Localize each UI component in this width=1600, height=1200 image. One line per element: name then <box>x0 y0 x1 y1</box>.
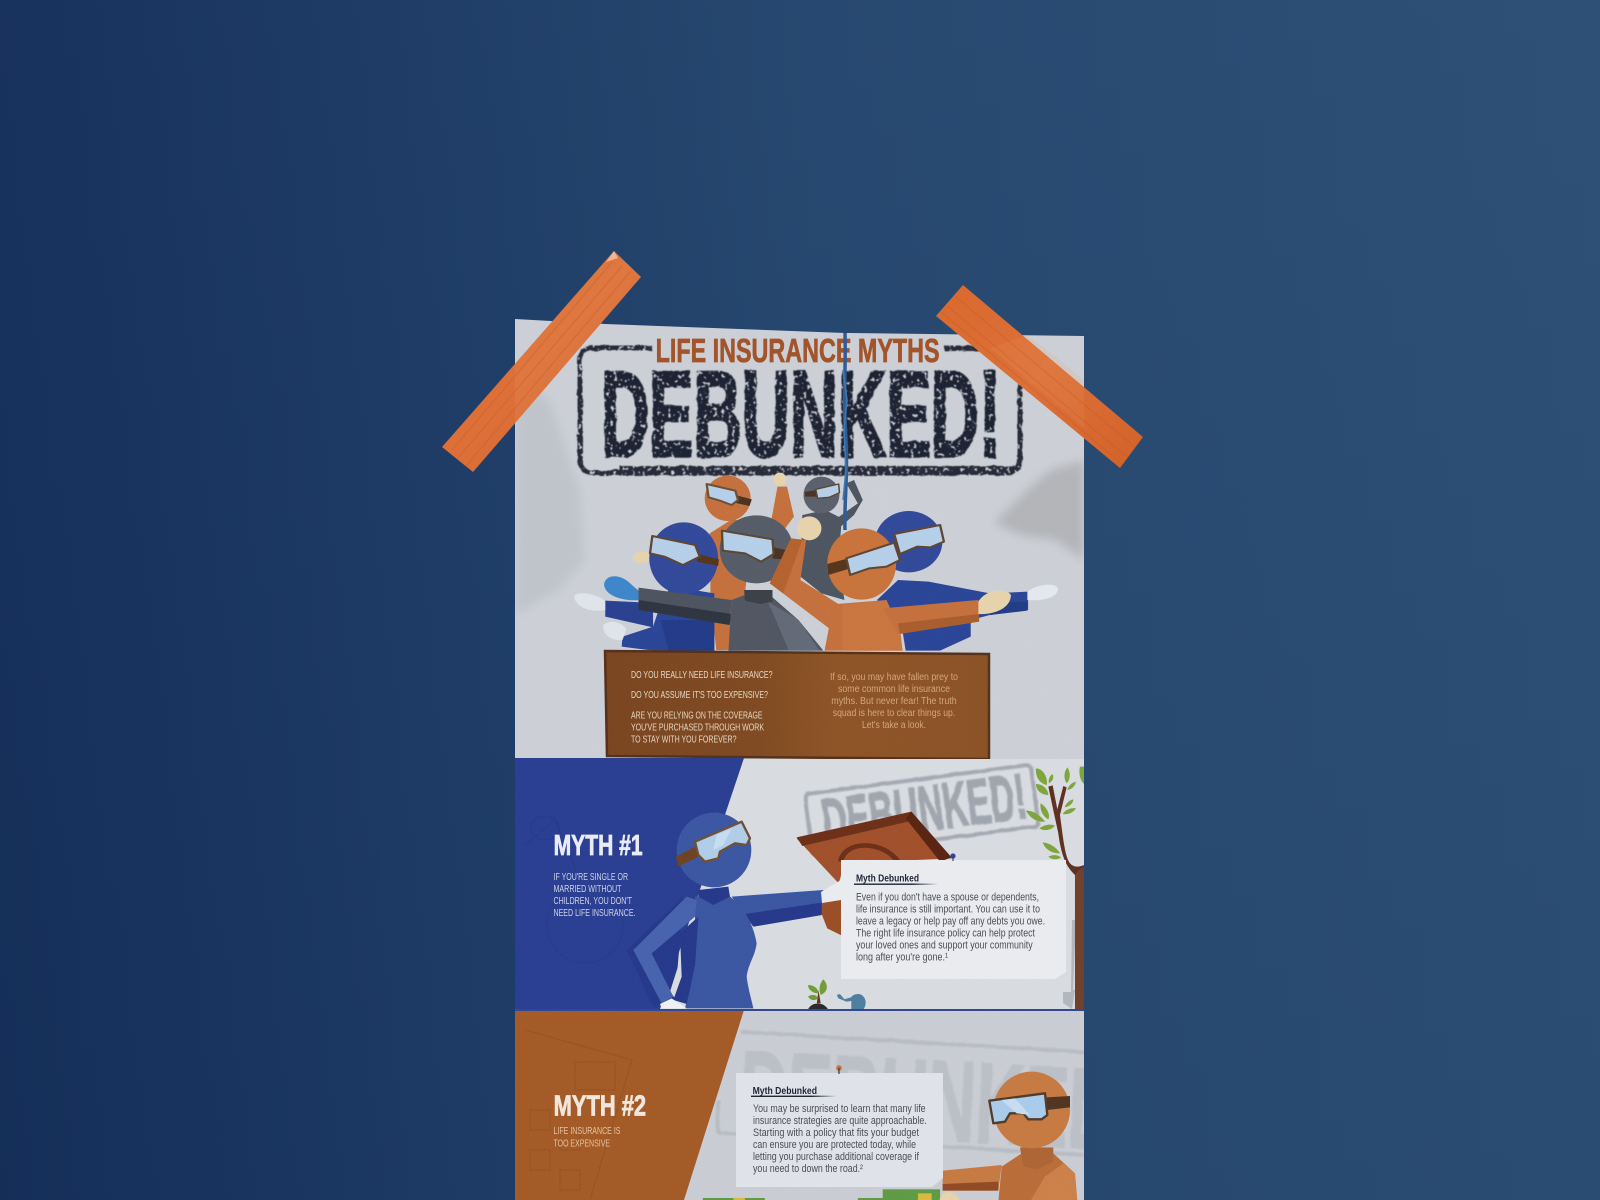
figure: blue myth person <box>627 813 823 1008</box>
callout: myth 1 debunked: The right life insurance policy can help protect <box>856 928 1035 940</box>
faint debunked stamp: DEBUNKED! <box>818 760 1030 858</box>
callout: myth 1 debunked: life insurance is still important. You can use it to <box>856 904 1040 916</box>
callout: myth 2 debunked: Starting with a policy that fits your budget <box>753 1127 919 1139</box>
myth 2 statement: LIFE INSURANCE IS <box>554 1126 621 1137</box>
callout: myth 2 debunked <box>736 1065 943 1187</box>
intro answer: myths. But never fear! The truth <box>831 696 957 707</box>
figure: back orange <box>705 473 794 650</box>
faint debunked stamp <box>716 1030 1084 1157</box>
intro questions: ARE YOU RELYING ON THE COVERAGE <box>631 710 763 721</box>
figure: back right blue <box>875 511 1058 651</box>
intro answer: squad is here to clear things up. <box>833 708 955 719</box>
leaves <box>1026 767 1084 859</box>
intro answer <box>830 672 958 731</box>
paper grain <box>515 315 1084 1200</box>
callout: myth 2 debunked: can ensure you are protected today, while <box>753 1139 916 1151</box>
callout: myth 1 debunked <box>821 853 1066 979</box>
myth 2 heading: MYTH #2 <box>554 1091 646 1123</box>
intro questions: YOU'VE PURCHASED THROUGH WORK <box>631 722 764 733</box>
paper smudges <box>517 396 1084 608</box>
tape right <box>936 285 1143 468</box>
stamp heading: debunked <box>580 346 1020 482</box>
faint calculator pattern <box>525 1030 632 1200</box>
intro questions: DO YOU REALLY NEED LIFE INSURANCE? <box>631 670 773 681</box>
tree stump <box>797 812 952 935</box>
callout: myth 1 debunked: leave a legacy or help pay off any debts you owe. <box>856 916 1045 928</box>
intro questions <box>631 670 773 745</box>
callout: myth 2 debunked: insurance strategies are quite approachable. <box>753 1115 927 1127</box>
callout: myth 1 debunked: your loved ones and support your community <box>856 940 1033 952</box>
money stacks <box>703 1189 940 1200</box>
tree <box>1026 767 1084 1010</box>
myth 1 heading: MYTH #1 <box>554 830 643 862</box>
myth 1 statement: NEED LIFE INSURANCE. <box>554 908 636 919</box>
intro answer: some common life insurance <box>838 684 950 695</box>
callout: myth 1 debunked: Myth Debunked <box>856 873 919 885</box>
stamp heading: debunked: DEBUNKED! <box>601 346 1001 482</box>
group of truth squad figures <box>574 473 1058 651</box>
myth 1 statement <box>554 872 636 919</box>
callout: myth 1 debunked: long after you're gone.¹ <box>856 952 948 964</box>
tape left <box>442 251 641 472</box>
myth 1 statement: IF YOU'RE SINGLE OR <box>554 872 628 883</box>
figure: orange myth person <box>939 1072 1077 1200</box>
rope and tear <box>843 333 847 530</box>
callout: myth 2 debunked: letting you purchase additional coverage if <box>753 1151 920 1163</box>
callout: myth 2 debunked: You may be surprised to learn that many life <box>753 1103 926 1115</box>
intro answer: If so, you may have fallen prey to <box>830 672 958 683</box>
intro brown panel <box>605 651 989 759</box>
figure: back gray on rope <box>800 477 863 600</box>
figure: left blue <box>574 522 719 651</box>
intro questions: DO YOU ASSUME IT'S TOO EXPENSIVE? <box>631 690 768 701</box>
faint pattern <box>525 816 623 963</box>
figure: front gray <box>604 515 823 651</box>
panel: myth 1 <box>515 758 1084 1010</box>
myth 1 statement: MARRIED WITHOUT <box>554 884 622 895</box>
intro answer: Let's take a look. <box>862 720 926 731</box>
faint debunked stamp: DEBUNKED! <box>736 1027 1142 1176</box>
panel: myth 2 <box>515 1009 1142 1200</box>
faint debunked stamp <box>804 759 1039 860</box>
title: life insurance myths: LIFE INSURANCE MYTHS <box>656 332 940 369</box>
myth 2 statement <box>554 1127 620 1146</box>
callout: myth 2 debunked: Myth Debunked <box>753 1085 817 1097</box>
figure: front orange <box>770 516 1011 651</box>
tree and shovel <box>1026 767 1084 1010</box>
poster <box>515 315 1142 1200</box>
intro questions: TO STAY WITH YOU FOREVER? <box>631 734 737 745</box>
myth 2 statement: TOO EXPENSIVE <box>554 1139 610 1150</box>
callout: myth 1 debunked: Even if you don't have a spouse or dependents, <box>856 892 1039 904</box>
callout: myth 2 debunked: you need to down the road.² <box>753 1163 863 1175</box>
sprout and watering can <box>808 979 866 1009</box>
myth 1 statement: CHILDREN, YOU DON'T <box>554 896 632 907</box>
